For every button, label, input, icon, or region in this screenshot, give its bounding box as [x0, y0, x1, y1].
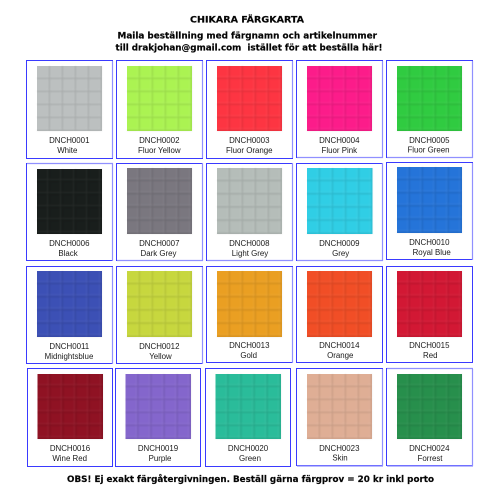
card: DNCH0014 Orange: DNCH0014 — [319, 341, 360, 350]
card: DNCH0007 Dark Grey — [116, 163, 203, 261]
card: DNCH0024 Forrest — [386, 368, 473, 466]
card: DNCH0020 Green: DNCH0020 — [228, 444, 269, 453]
card: DNCH0024 Forrest: Forrest — [418, 454, 443, 463]
card: DNCH0007 Dark Grey: DNCH0007 — [139, 239, 179, 248]
card: DNCH0023 Skin: Skin — [332, 454, 348, 462]
card: DNCH0011 Midnightsblue — [26, 266, 112, 364]
card: DNCH0009 Grey — [296, 163, 383, 261]
card: DNCH0004 Fluor Pink: Fluor Pink — [322, 146, 357, 155]
card: DNCH0016 Wine Red: Wine Red — [52, 454, 87, 463]
card: DNCH0003 Fluor Orange: DNCH0003 — [229, 136, 270, 145]
card: DNCH0014 Orange — [296, 266, 382, 362]
card: DNCH0023 Skin — [296, 368, 383, 466]
card: DNCH0003 Fluor Orange — [206, 60, 292, 158]
card: DNCH0009 Grey: Grey — [332, 249, 349, 258]
card: DNCH0009 Grey: DNCH0009 — [319, 239, 360, 248]
card: DNCH0013 Gold: Gold — [240, 351, 257, 360]
card: DNCH0020 Green — [206, 368, 290, 466]
card: DNCH0010 Royal Blue: DNCH0010 — [409, 238, 450, 247]
card: DNCH0016 Wine Red: DNCH0016 — [50, 444, 91, 453]
instructions: Maila beställning med färgnamn och artikelnummer — [118, 32, 378, 42]
card: DNCH0002 Fluor Yellow: DNCH0002 — [139, 136, 179, 145]
instructions — [116, 32, 382, 54]
card: DNCH0015 Red: Red — [423, 351, 438, 360]
card: DNCH0008 Light Grey: Light Grey — [232, 249, 268, 258]
card: DNCH0010 Royal Blue: Royal Blue — [413, 248, 451, 257]
card: DNCH0006 Black: DNCH0006 — [49, 239, 90, 248]
card: DNCH0012 Yellow — [116, 266, 202, 364]
card: DNCH0019 Purple: Purple — [149, 454, 172, 463]
card: DNCH0019 Purple: DNCH0019 — [138, 444, 179, 453]
card: DNCH0005 Fluor Green: DNCH0005 — [409, 136, 450, 145]
title: CHIKARA FÄRGKARTA — [190, 14, 304, 26]
card: DNCH0001 White: White — [57, 146, 78, 155]
card: DNCH0020 Green: Green — [239, 454, 261, 463]
card: DNCH0001 White — [26, 60, 112, 158]
card: DNCH0007 Dark Grey: Dark Grey — [141, 249, 177, 258]
card: DNCH0008 Light Grey — [206, 163, 293, 261]
card: DNCH0004 Fluor Pink: DNCH0004 — [319, 136, 360, 145]
card: DNCH0005 Fluor Green — [386, 60, 473, 158]
card: DNCH0006 Black — [26, 163, 113, 261]
card: DNCH0001 White: DNCH0001 — [49, 136, 89, 145]
card: DNCH0003 Fluor Orange: Fluor Orange — [226, 146, 273, 155]
card: DNCH0016 Wine Red — [28, 368, 112, 466]
card: DNCH0011 Midnightsblue: Midnightsblue — [45, 352, 94, 361]
card: DNCH0014 Orange: Orange — [327, 351, 354, 360]
card: DNCH0019 Purple — [116, 368, 200, 466]
instructions: till drakjohan@gmail.com istället för att beställa här! — [116, 44, 382, 54]
card: DNCH0011 Midnightsblue: DNCH0011 — [49, 342, 89, 351]
card: DNCH0013 Gold: DNCH0013 — [229, 341, 270, 350]
card: DNCH0024 Forrest: DNCH0024 — [409, 444, 450, 453]
card: DNCH0012 Yellow: DNCH0012 — [139, 342, 179, 351]
card: DNCH0015 Red — [386, 266, 472, 362]
card: DNCH0015 Red: DNCH0015 — [409, 341, 450, 350]
card: DNCH0002 Fluor Yellow — [116, 60, 202, 158]
card: DNCH0004 Fluor Pink — [296, 60, 383, 158]
card: DNCH0010 Royal Blue — [386, 162, 472, 260]
footer note: OBS! Ej exakt färgåtergivningen. Beställ gärna färgprov = 20 kr inkl porto — [67, 474, 434, 485]
card: DNCH0008 Light Grey: DNCH0008 — [229, 239, 270, 248]
card: DNCH0006 Black: Black — [58, 249, 78, 258]
card: DNCH0023 Skin: DNCH0023 — [319, 444, 360, 453]
card: DNCH0013 Gold — [206, 266, 292, 363]
card: DNCH0002 Fluor Yellow: Fluor Yellow — [138, 146, 181, 155]
card: DNCH0012 Yellow: Yellow — [149, 352, 172, 361]
card: DNCH0005 Fluor Green: Fluor Green — [407, 146, 450, 154]
